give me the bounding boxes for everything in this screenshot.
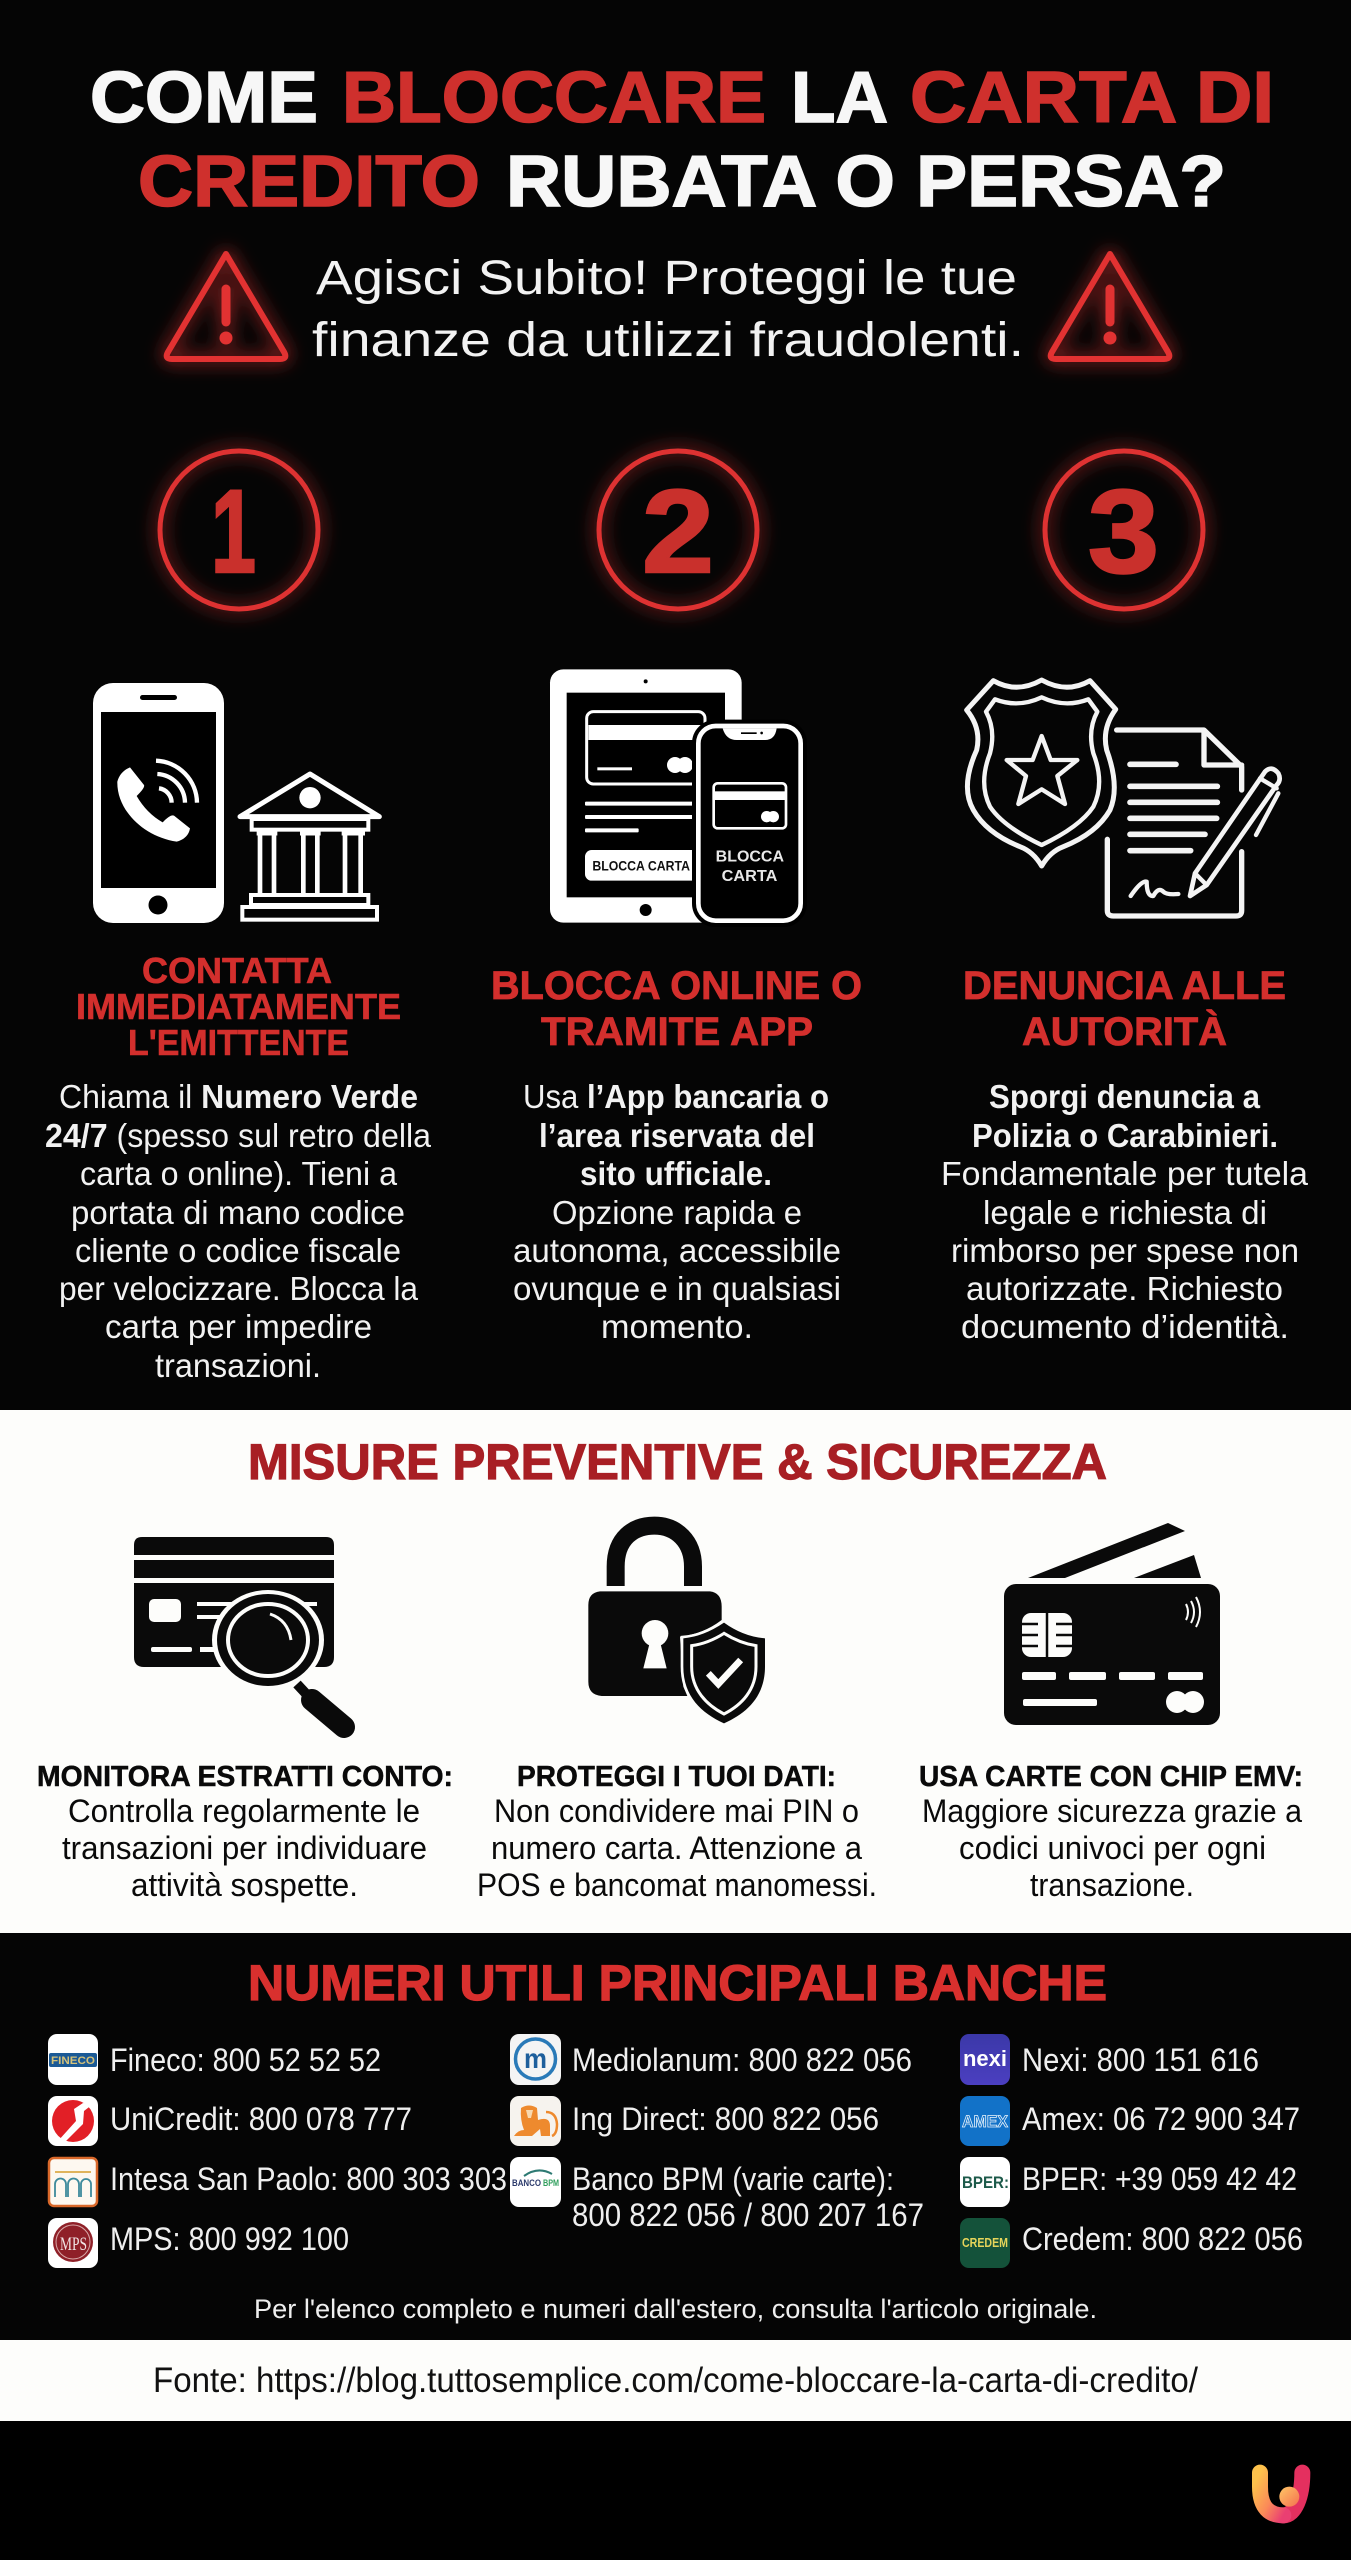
logo: BPER bbox=[960, 2157, 1010, 2207]
text block: step 1 bbox=[45, 1078, 432, 1384]
text block: step 3: Polizia o Carabinieri. bbox=[972, 1117, 1278, 1154]
text block: step 1: carta o online). Tieni a bbox=[80, 1155, 398, 1192]
text block: step 2: sito ufficiale. bbox=[580, 1155, 772, 1192]
row: Banco BPM numbers bbox=[572, 2161, 924, 2233]
icon: tablet and phone with blocca carta: BLOCCA CARTA bbox=[592, 858, 690, 874]
text block: step 3: rimborso per spese non bbox=[951, 1232, 1299, 1269]
title: CARTA DI bbox=[910, 58, 1274, 138]
icon: credit card with EMV chip bbox=[1004, 1523, 1220, 1725]
text block: proteggi i tuoi dati: POS e bancomat manomessi. bbox=[477, 1867, 877, 1903]
heading: step 3: DENUNCIA ALLE bbox=[963, 964, 1286, 1008]
title: COME bbox=[90, 58, 318, 138]
step number 2: 2 bbox=[642, 466, 714, 598]
heading: step 2 bbox=[491, 964, 862, 1054]
logo: Credem bbox=[960, 2218, 1010, 2268]
text block: usa carte con chip emv: codici univoci per ogni bbox=[959, 1830, 1266, 1866]
logo: Banco BPM bbox=[510, 2157, 561, 2207]
row: Intesa number: Intesa San Paolo: 800 303 303 bbox=[110, 2161, 507, 2197]
source link text: Fonte: https://blog.tuttosemplice.com/come-bloccare-la-carta-di-credito/ bbox=[153, 2361, 1198, 2400]
row: Amex number: Amex: 06 72 900 347 bbox=[1022, 2101, 1300, 2137]
logo: Amex: AMEX bbox=[962, 2112, 1009, 2131]
text block: proteggi i tuoi dati: PROTEGGI I TUOI DATI: bbox=[517, 1761, 836, 1793]
text block: step 1: transazioni. bbox=[155, 1347, 321, 1384]
subtitle: Agisci Subito! Proteggi le tue bbox=[316, 252, 1017, 305]
text block: usa carte con chip emv: Maggiore sicurezza grazie a bbox=[922, 1793, 1302, 1829]
text block: proteggi i tuoi dati: Non condividere mai PIN o bbox=[494, 1793, 859, 1829]
subtitle bbox=[312, 252, 1024, 367]
row: MPS number: MPS: 800 992 100 bbox=[110, 2221, 349, 2257]
title: CREDITO bbox=[138, 142, 480, 222]
logo: Fineco bbox=[48, 2034, 98, 2085]
text block: step 1: 24/7 (spesso sul retro della bbox=[45, 1117, 432, 1154]
row: BPER number: BPER: +39 059 42 42 bbox=[1022, 2161, 1297, 2197]
text block: monitora estratti conto: Controlla regolarmente le bbox=[68, 1793, 420, 1829]
row: Ing Direct number: Ing Direct: 800 822 056 bbox=[572, 2101, 879, 2137]
logo: Nexi: nexi bbox=[963, 2046, 1007, 2071]
row: Banco BPM numbers: 800 822 056 / 800 207 167 bbox=[572, 2197, 924, 2233]
text block: step 2: Opzione rapida e bbox=[552, 1194, 802, 1231]
heading: step 1 bbox=[76, 950, 401, 1063]
icon: padlock with shield bbox=[588, 1526, 765, 1723]
logo: BPER: BPER: bbox=[962, 2173, 1009, 2192]
text block: step 3: documento d’identità. bbox=[961, 1308, 1289, 1345]
title: LA bbox=[791, 58, 888, 138]
logo: TuttoSemplice mark bbox=[1260, 2473, 1302, 2515]
heading: numeri utili: NUMERI UTILI PRINCIPALI BANCHE bbox=[248, 1955, 1107, 2011]
icon: warning triangle left bbox=[167, 254, 285, 359]
text block: monitora estratti conto: transazioni per individuare bbox=[62, 1830, 427, 1866]
row: Banco BPM numbers: Banco BPM (varie carte): bbox=[572, 2161, 894, 2197]
note: elenco completo: Per l'elenco completo e numeri dall'estero, consulta l'articolo originale. bbox=[254, 2294, 1097, 2324]
text block: monitora estratti conto: MONITORA ESTRATTI CONTO: bbox=[37, 1761, 453, 1793]
logo: MPS bbox=[48, 2218, 98, 2268]
step number 2 bbox=[599, 451, 757, 609]
text block: step 3: autorizzate. Richiesto bbox=[966, 1270, 1283, 1307]
row: UniCredit number: UniCredit: 800 078 777 bbox=[110, 2101, 412, 2137]
heading: step 1: CONTATTA bbox=[142, 950, 332, 991]
text block: step 1: carta per impedire bbox=[105, 1308, 372, 1345]
text block: step 3 bbox=[941, 1078, 1309, 1345]
text block: step 2: momento. bbox=[601, 1308, 753, 1345]
heading: misure preventive: MISURE PREVENTIVE & SICUREZZA bbox=[248, 1434, 1107, 1490]
logo: Intesa San Paolo bbox=[49, 2158, 97, 2206]
text block: step 2: Usa l’App bancaria o bbox=[523, 1078, 829, 1115]
title bbox=[90, 58, 1274, 222]
icon: tablet and phone with blocca carta: CARTA bbox=[722, 868, 777, 885]
text block: step 2: autonoma, accessibile bbox=[513, 1232, 841, 1269]
logo: Banco BPM: BANCO bbox=[512, 2178, 541, 2189]
row: Fineco number: Fineco: 800 52 52 52 bbox=[110, 2042, 381, 2078]
heading: step 1: IMMEDIATAMENTE bbox=[76, 986, 401, 1027]
text block: step 2: l’area riservata del bbox=[539, 1117, 815, 1154]
icon: bank building bbox=[240, 774, 379, 920]
heading: step 2: BLOCCA ONLINE O bbox=[491, 964, 862, 1008]
text block: step 2 bbox=[513, 1078, 841, 1345]
step number 1 bbox=[160, 451, 318, 609]
text block: step 2: ovunque e in qualsiasi bbox=[513, 1270, 841, 1307]
row: Credem number: Credem: 800 822 056 bbox=[1022, 2221, 1303, 2257]
subtitle: finanze da utilizzi fraudolenti. bbox=[312, 314, 1024, 367]
step number 1: 1 bbox=[211, 466, 256, 598]
panel: misure preventive bbox=[0, 1410, 1351, 1933]
text block: usa carte con chip emv bbox=[919, 1761, 1303, 1903]
text block: proteggi i tuoi dati: numero carta. Attenzione a bbox=[491, 1830, 862, 1866]
text block: usa carte con chip emv: USA CARTE CON CHIP EMV: bbox=[919, 1761, 1303, 1793]
row: Nexi number: Nexi: 800 151 616 bbox=[1022, 2042, 1259, 2078]
logo: Mediolanum: m bbox=[524, 2043, 547, 2074]
icon: warning triangle right bbox=[1051, 254, 1169, 359]
heading: step 2: TRAMITE APP bbox=[541, 1010, 813, 1054]
icon: smartphone with call bbox=[93, 683, 224, 923]
text block: step 3: legale e richiesta di bbox=[983, 1194, 1267, 1231]
text block: monitora estratti conto bbox=[37, 1761, 453, 1903]
text block: monitora estratti conto: attività sospette. bbox=[131, 1867, 358, 1903]
heading: step 3: AUTORITÀ bbox=[1022, 1009, 1227, 1054]
step number 3 bbox=[1045, 451, 1203, 609]
text block: step 1: per velocizzare. Blocca la bbox=[59, 1270, 419, 1307]
icon: document with pencil bbox=[1107, 730, 1280, 916]
icon: card with magnifier bbox=[134, 1537, 344, 1727]
text block: proteggi i tuoi dati bbox=[477, 1761, 877, 1903]
step number 3: 3 bbox=[1088, 466, 1159, 598]
logo: Credem: CREDEM bbox=[962, 2236, 1008, 2250]
logo: UniCredit bbox=[48, 2096, 98, 2146]
logo: Mediolanum bbox=[510, 2034, 561, 2085]
title: BLOCCARE bbox=[342, 58, 766, 138]
text block: step 1: portata di mano codice bbox=[71, 1194, 405, 1231]
icon: police badge bbox=[967, 680, 1116, 866]
panel: source strip bbox=[0, 2340, 1351, 2421]
logo: Nexi bbox=[960, 2034, 1010, 2085]
text block: step 3: Fondamentale per tutela bbox=[941, 1155, 1309, 1192]
heading: step 1: L'EMITTENTE bbox=[128, 1022, 349, 1063]
text block: step 3: Sporgi denuncia a bbox=[989, 1078, 1261, 1115]
row: Mediolanum number: Mediolanum: 800 822 056 bbox=[572, 2042, 912, 2078]
logo: Banco BPM: BPM bbox=[543, 2178, 559, 2189]
icon: tablet and phone with blocca carta: BLOCCA bbox=[716, 849, 784, 866]
text block: step 1: cliente o codice fiscale bbox=[75, 1232, 401, 1269]
text block: step 1: Chiama il Numero Verde bbox=[59, 1078, 418, 1115]
logo: Fineco: FINECO bbox=[51, 2055, 95, 2067]
heading: step 3 bbox=[963, 964, 1286, 1054]
logo: Amex bbox=[960, 2096, 1010, 2146]
logo: MPS: MPS bbox=[60, 2234, 87, 2255]
icon: tablet and phone with blocca carta bbox=[550, 669, 801, 923]
text block: usa carte con chip emv: transazione. bbox=[1030, 1867, 1194, 1903]
logo: ING lion bbox=[510, 2096, 561, 2146]
title: RUBATA O PERSA? bbox=[506, 142, 1226, 222]
